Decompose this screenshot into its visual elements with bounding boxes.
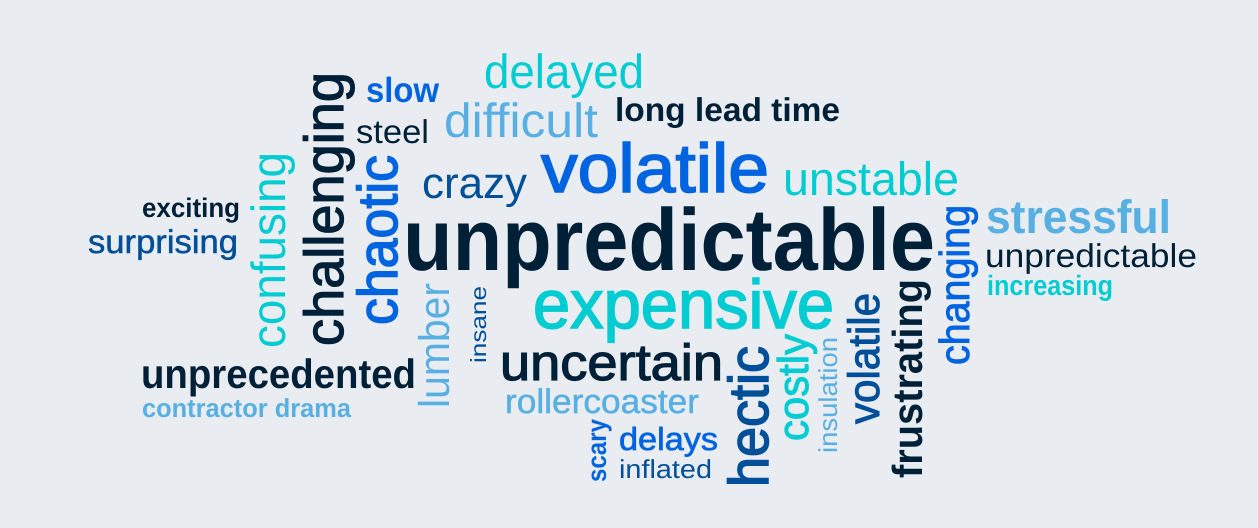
word: challenging (vertical): challenging [293, 72, 355, 346]
word: rollercoaster: rollercoaster [505, 383, 699, 421]
word: expensive: expensive [533, 266, 834, 343]
word: crazy: crazy [422, 159, 527, 208]
word: unpredictable (small): unpredictable [985, 237, 1197, 274]
word: insane (vertical): insane [466, 286, 491, 363]
word: unstable: unstable [783, 152, 959, 205]
word: volatile (vertical): volatile [840, 293, 889, 424]
word: scary (vertical): scary [582, 419, 612, 482]
word: confusing (vertical): confusing [243, 152, 296, 348]
word: volatile (large): volatile [541, 130, 769, 207]
word: delays: delays [619, 421, 718, 457]
word: exciting: exciting [142, 193, 240, 223]
word: steel: steel [356, 113, 429, 150]
word: increasing: increasing [987, 270, 1113, 301]
word: chaotic (vertical): chaotic [346, 155, 409, 325]
word: lumber (vertical): lumber [411, 283, 459, 408]
word: long lead time: long lead time [615, 91, 840, 128]
word: difficult: difficult [444, 95, 598, 148]
word: inflated: inflated [619, 454, 712, 484]
word: changing (vertical): changing [931, 205, 978, 365]
word: uncertain: uncertain [500, 334, 723, 391]
word: unpredictable (largest): unpredictable [403, 190, 935, 289]
word: costly (vertical): costly [770, 334, 818, 441]
word: hectic (vertical): hectic [717, 346, 780, 487]
word: insulation (vertical): insulation [813, 337, 843, 453]
word: contractor drama: contractor drama [142, 393, 352, 423]
word: surprising: surprising [88, 223, 238, 260]
word: delayed: delayed [484, 46, 644, 99]
word: slow: slow [366, 71, 440, 110]
word: frustrating (vertical): frustrating [884, 279, 931, 478]
word: unprecedented: unprecedented [141, 351, 416, 397]
word: stressful: stressful [986, 190, 1171, 243]
